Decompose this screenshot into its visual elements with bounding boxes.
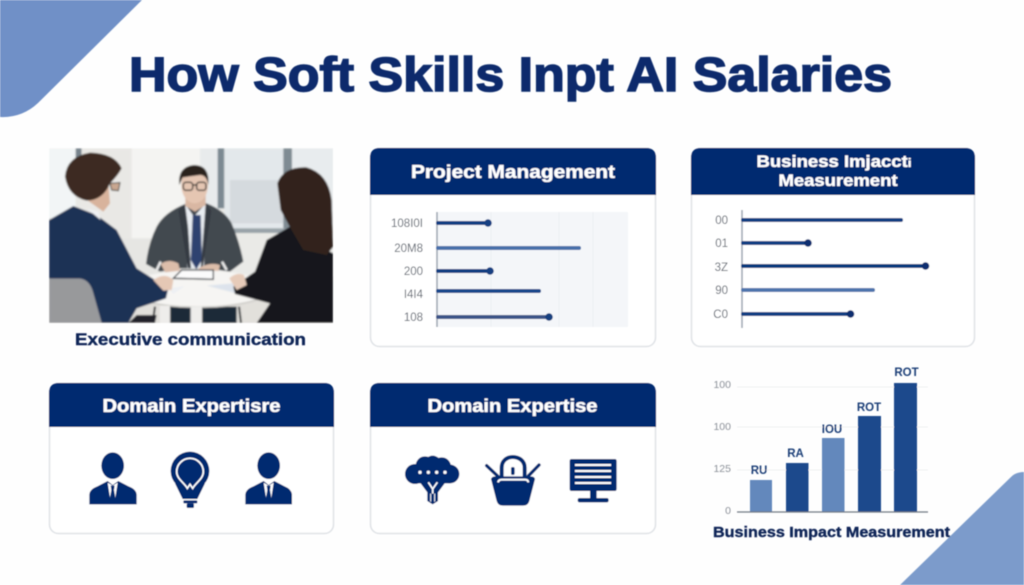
card header: [49, 383, 334, 427]
bar labels: ROT: [894, 367, 919, 379]
row labels: 108: [404, 312, 423, 324]
card header: [370, 148, 656, 195]
icon: business person left: [89, 452, 137, 504]
y axis labels: 0: [725, 505, 731, 517]
row labels: 200: [404, 266, 423, 278]
icons row: [405, 456, 617, 506]
card background: [370, 148, 656, 346]
lollipop chart: [391, 212, 628, 327]
panel: domain expertise: [370, 383, 656, 534]
panel: domain expertisre: [49, 383, 334, 534]
icon: basket: [487, 457, 539, 506]
icon: tree brain: [405, 456, 459, 504]
header text: Business Imjacct i: [756, 153, 912, 171]
decorative corner: top left: [0, 0, 142, 117]
chair right: [285, 281, 333, 323]
plot area: [437, 212, 628, 327]
right person: [229, 167, 333, 323]
row labels: 20M8: [394, 243, 423, 255]
header text: [756, 153, 912, 190]
photo windows: [49, 148, 333, 323]
y axis labels: 125: [713, 463, 731, 475]
panel: business impact measurement lollipop: [691, 148, 975, 346]
bar labels: IOU: [822, 424, 842, 436]
icon: monitor: [570, 459, 617, 502]
bars: [750, 383, 917, 512]
grid lines: [737, 387, 928, 470]
chair left: [49, 279, 102, 323]
card background: [692, 148, 974, 346]
panel: executive communication photo: [49, 148, 333, 323]
row labels: 3Z: [715, 262, 728, 274]
bar labels: RU: [751, 465, 767, 477]
header text: Measurement: [778, 172, 898, 190]
y axis labels: [713, 379, 731, 517]
y axis labels: 100: [713, 379, 731, 391]
card header: [691, 148, 975, 195]
bars: [743, 220, 929, 318]
bars: [438, 219, 579, 321]
table and papers: [150, 268, 257, 324]
card background: [370, 384, 656, 534]
left person: [49, 153, 173, 323]
row labels: I4I4: [404, 289, 424, 301]
row labels: [713, 215, 728, 321]
icon: light bulb: [171, 452, 209, 508]
title: How Soft Skills Inpt AI Salaries: [129, 49, 892, 102]
row labels: 01: [715, 238, 728, 250]
card header: [370, 383, 656, 427]
row labels: C0: [713, 309, 728, 321]
row labels: 90: [715, 285, 728, 297]
caption: business impact measurement: Business Impact Measurement: [713, 524, 950, 541]
center man: [146, 165, 243, 275]
lollipop chart: [713, 210, 929, 328]
icon: business person right: [245, 452, 292, 504]
caption: executive communication: Executive communication: [75, 331, 306, 349]
card background: [50, 384, 334, 534]
decorative corner: bottom right: [900, 472, 1024, 585]
panel: project management: [370, 148, 656, 346]
header text: Domain Expertisre: [102, 396, 280, 416]
bar labels: [751, 367, 919, 477]
y axis labels: 100: [713, 421, 731, 433]
row labels: 00: [715, 215, 728, 227]
bar labels: RA: [787, 448, 804, 460]
column chart: business impact measurement: [713, 367, 928, 517]
header text: Domain Expertise: [428, 396, 598, 416]
row labels: [391, 218, 424, 324]
icons row: [89, 452, 292, 508]
bar labels: ROT: [857, 402, 881, 414]
photo background wall: [49, 195, 334, 272]
header text: Project Management: [411, 162, 615, 182]
row labels: 108I0I: [391, 218, 423, 230]
